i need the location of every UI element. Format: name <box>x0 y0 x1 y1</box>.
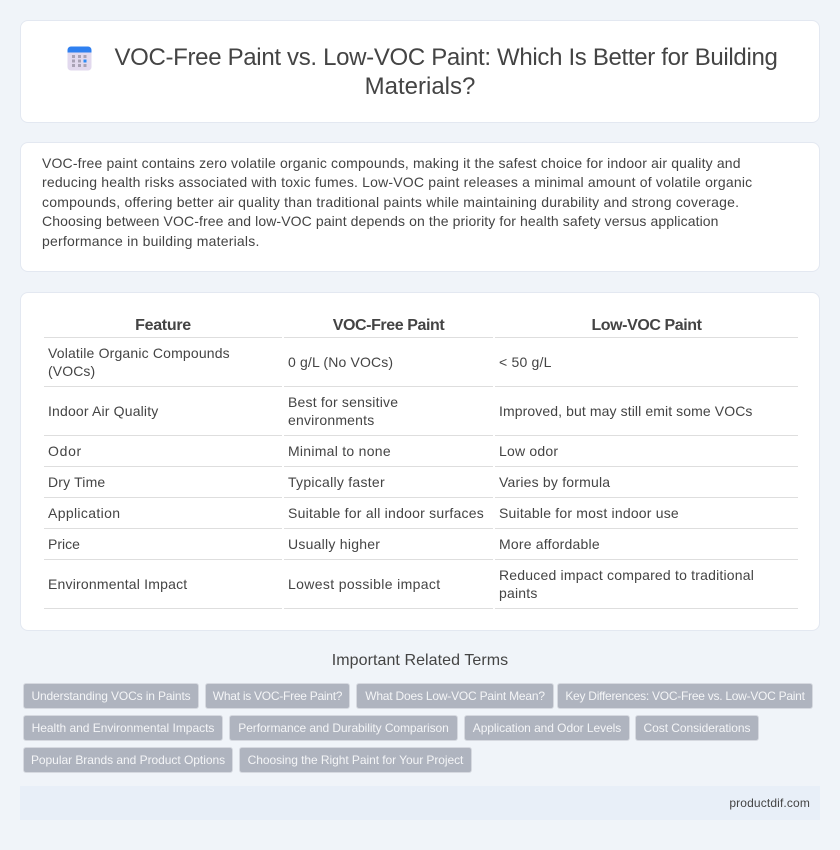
intro card <box>20 142 820 272</box>
related terms tags: Performance and Durability Comparison <box>238 721 449 735</box>
row: indoor air quality: environments <box>288 412 374 428</box>
related terms heading: Important Related Terms <box>332 652 508 669</box>
intro text: Choosing between VOC-free and low-VOC paint depends on the priority for health safety versus application <box>42 213 719 229</box>
intro text: VOC-free paint contains zero volatile organic compounds, making it the safest choice for indoor air quality and <box>42 155 741 171</box>
row: VOCs: Volatile Organic Compounds <box>48 345 230 361</box>
row: dry time: Dry Time <box>48 474 105 490</box>
row: environmental impact: Reduced impact compared to traditional <box>499 567 754 583</box>
row: VOCs <box>48 345 552 379</box>
related terms tags: What Does Low-VOC Paint Mean? <box>365 689 545 703</box>
row: environmental impact: Lowest possible impact <box>288 576 440 592</box>
related terms tags: Application and Odor Levels <box>473 721 621 735</box>
related terms tags: What is VOC-Free Paint? <box>213 689 342 703</box>
comparison table card <box>20 292 820 631</box>
row: application <box>48 505 679 521</box>
intro text: compounds, offering better air quality than traditional paints while maintaining durability and strong coverage. <box>42 194 739 210</box>
row: price: More affordable <box>499 536 600 552</box>
row: environmental impact: paints <box>499 585 538 601</box>
row: application: Suitable for most indoor use <box>499 505 679 521</box>
intro text: performance in building materials. <box>42 233 260 249</box>
header row <box>135 317 702 334</box>
row: application: Application <box>48 505 120 521</box>
row: indoor air quality: Best for sensitive <box>288 394 398 410</box>
row: indoor air quality: Improved, but may still emit some VOCs <box>499 403 753 419</box>
row: price: Usually higher <box>288 536 380 552</box>
row: VOCs: 0 g/L (No VOCs) <box>288 354 393 370</box>
comparison table <box>44 317 798 609</box>
title <box>114 44 778 100</box>
row: indoor air quality <box>48 394 753 428</box>
header card: VOC-Free Paint vs. Low-VOC Paint: Which Is Better for Building <box>114 44 778 71</box>
row: application: Suitable for all indoor surfaces <box>288 505 484 521</box>
icon: calendar <box>68 46 92 70</box>
footer source: productdif.com <box>729 796 810 810</box>
footer bar <box>20 786 820 820</box>
related terms tags: Health and Environmental Impacts <box>32 721 214 735</box>
row: dry time: Varies by formula <box>499 474 610 490</box>
header row: Low-VOC Paint <box>591 317 702 334</box>
intro text <box>42 155 752 249</box>
row: price <box>48 536 600 552</box>
intro text: reducing health risks associated with toxic fumes. Low-VOC paint releases a minimal amount of volatile organic <box>42 174 752 190</box>
row: dry time: Typically faster <box>288 474 385 490</box>
related terms tags: Understanding VOCs in Paints <box>31 689 191 703</box>
related terms tags <box>23 683 813 773</box>
row: price: Price <box>48 536 80 552</box>
row: environmental impact <box>48 567 754 601</box>
related terms tags: Choosing the Right Paint for Your Project <box>248 753 463 767</box>
related terms tags: Popular Brands and Product Options <box>31 753 225 767</box>
row: dry time <box>48 474 610 490</box>
row: environmental impact: Environmental Impact <box>48 576 187 592</box>
row: VOCs: (VOCs) <box>48 363 95 379</box>
related terms tags: Cost Considerations <box>644 721 750 735</box>
row: indoor air quality: Indoor Air Quality <box>48 403 158 419</box>
row: odor: Odor <box>48 443 82 459</box>
header card: Materials? <box>365 73 475 100</box>
row: VOCs: < 50 g/L <box>499 354 552 370</box>
header row: VOC-Free Paint <box>333 317 444 334</box>
row: odor <box>48 443 558 459</box>
header row: Feature <box>135 317 191 334</box>
row: odor: Minimal to none <box>288 443 391 459</box>
header card <box>20 20 820 123</box>
related terms tags: Key Differences: VOC-Free vs. Low-VOC Paint <box>565 689 805 703</box>
row: odor: Low odor <box>499 443 558 459</box>
